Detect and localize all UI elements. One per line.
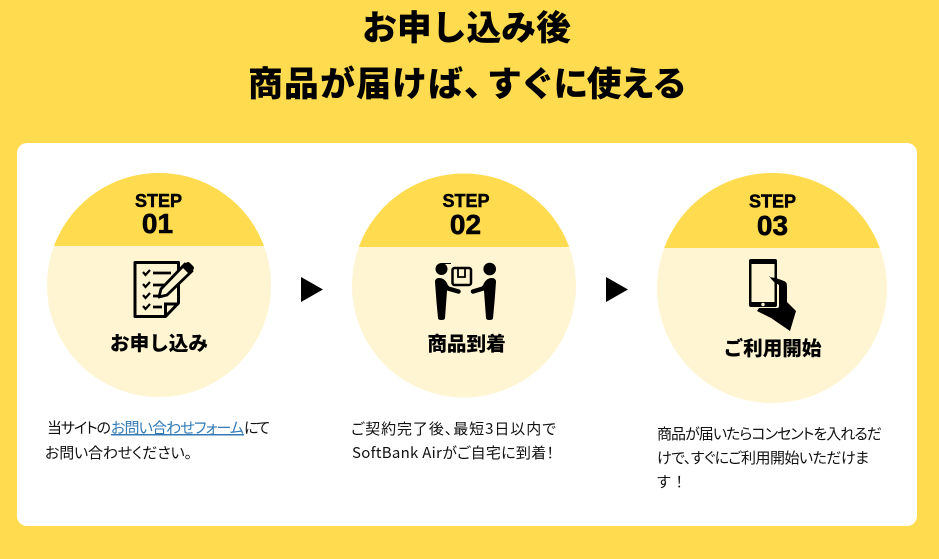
step 3 label: ご利用開始 <box>724 332 822 361</box>
step 3 description: 商品が届いたらコンセントを入れるだ <box>657 423 882 444</box>
panel: steps card <box>17 143 917 526</box>
title: お申し込み後 <box>362 1 571 51</box>
step 2 circle <box>352 174 576 398</box>
step 1 circle <box>47 173 271 397</box>
step 3 badge: 03 <box>757 210 788 241</box>
step 1 description: にて <box>244 417 270 438</box>
title <box>248 1 687 107</box>
icon: checklist and pencil <box>135 262 194 316</box>
step 1 label: お申し込み <box>110 327 208 356</box>
step 1 description: 当サイトの <box>47 417 111 438</box>
title: すぐに使える <box>487 57 687 107</box>
step 2 description <box>351 418 556 463</box>
step 1 description: お問い合わせフォーム <box>111 417 244 438</box>
step 2 badge: 02 <box>450 209 481 240</box>
step 2 badge <box>442 191 490 240</box>
icon: hand holding smartphone <box>749 259 796 331</box>
step 3 description: けで、すぐにご利用開始いただけま <box>657 447 869 468</box>
step 3 description: す！ <box>657 471 683 492</box>
step 1 description <box>45 417 270 463</box>
icon: parcel handover <box>435 263 496 320</box>
step 1 badge: 01 <box>142 208 173 239</box>
step 1 badge: STEP <box>135 191 182 211</box>
step 3 badge <box>749 192 796 241</box>
step 2 description: SoftBank Airがご自宅に到着！ <box>352 442 554 463</box>
step 1 description: お問い合わせください。 <box>45 442 192 463</box>
step 3 circle <box>657 173 887 403</box>
step 3 badge: STEP <box>749 192 796 212</box>
arrow 1 <box>301 277 323 302</box>
step 2 label: 商品到着 <box>427 328 506 356</box>
title: 、 <box>464 57 499 107</box>
step 1 badge <box>135 191 182 239</box>
step 2 description: ご契約完了後、最短3日以内で <box>351 418 556 439</box>
step 2 badge: STEP <box>442 191 490 211</box>
step 3 description <box>657 423 882 492</box>
title: 商品が届けば <box>248 57 463 107</box>
arrow 2 <box>606 277 628 302</box>
